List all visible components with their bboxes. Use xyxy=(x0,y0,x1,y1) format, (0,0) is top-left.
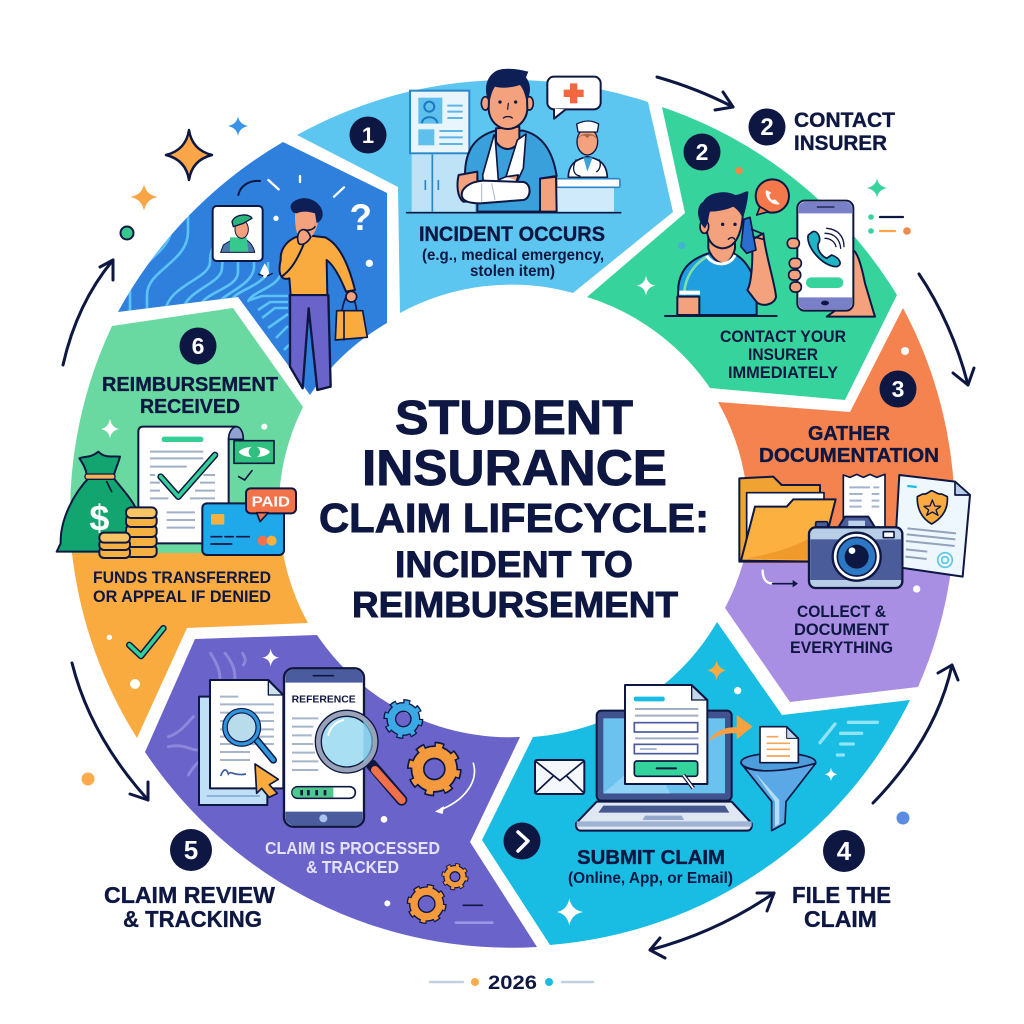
badge: number 6 xyxy=(180,328,216,364)
text: claim is processed and tracked: & TRACKED xyxy=(306,857,399,877)
panel: step 5 outside label: 5 xyxy=(184,835,198,865)
icon: coin stacks xyxy=(99,507,157,558)
panel: step 2 outside label: INSURER xyxy=(794,131,887,155)
icon: large orange gear xyxy=(412,746,457,792)
text: gather documentation: DOCUMENTATION xyxy=(759,445,939,467)
text: funds transferred or appeal if denied: OR APPEAL IF DENIED xyxy=(93,587,271,606)
text: funds transferred or appeal if denied xyxy=(93,568,271,606)
illustration: injured student and nurse xyxy=(407,69,621,213)
title xyxy=(319,392,709,625)
title: INCIDENT TO xyxy=(395,544,633,585)
text: incident occurs xyxy=(419,223,605,280)
text: contact your insurer immediately: IMMEDIATELY xyxy=(728,363,839,382)
title: INSURANCE xyxy=(362,440,667,496)
text: reimbursement received: RECEIVED xyxy=(140,396,240,418)
text: submit claim: SUBMIT CLAIM xyxy=(577,847,725,869)
panel: step 5 outside label xyxy=(104,829,276,932)
text: collect and document everything: COLLECT & xyxy=(797,602,886,621)
panel: step 2 outside label xyxy=(748,108,895,155)
text: submit claim: (Online, App, or Email) xyxy=(568,870,733,887)
text: reimbursement received xyxy=(102,374,278,418)
badge: number 3 xyxy=(880,370,916,408)
illustration: laptop form and funnel xyxy=(535,661,877,926)
text: contact your insurer immediately: INSURER xyxy=(748,345,818,364)
badge: number 1: 1 xyxy=(362,123,374,148)
arrow: step 5 to 6 xyxy=(72,663,148,800)
text: incident occurs: (e.g., medical emergency, xyxy=(422,247,604,264)
footer: year 2026 xyxy=(430,972,593,994)
illustration: documents, phone, magnifier and gears: REFERENCE xyxy=(292,694,356,705)
panel: step 4 outside label: FILE THE xyxy=(792,882,891,908)
badge: chevron xyxy=(504,822,540,860)
icon: medium orange gear xyxy=(410,887,443,921)
arrow: step 4 to 5 xyxy=(650,893,774,958)
text: gather documentation: GATHER xyxy=(808,423,891,445)
text: contact your insurer immediately xyxy=(720,327,846,382)
text: reimbursement received: REIMBURSEMENT xyxy=(102,374,278,396)
text: gather documentation xyxy=(759,423,939,467)
arrow: step 1 to 2 xyxy=(657,77,733,110)
illustration: folder, receipt, camera and report xyxy=(739,474,970,593)
text: claim is processed and tracked: CLAIM IS PROCESSED xyxy=(265,838,440,858)
badge: number 6: 6 xyxy=(192,333,204,359)
icon: sparkles and dots xyxy=(82,116,911,824)
text: claim is processed and tracked xyxy=(265,838,440,877)
panel: step 2 contact your insurer xyxy=(587,107,897,400)
panel: step 5 claim processed and tracked xyxy=(145,635,537,948)
text: contact your insurer immediately: CONTACT YOUR xyxy=(720,327,846,346)
illustration: thinking person with bag: ? xyxy=(349,197,372,238)
badge: number 3: 3 xyxy=(892,376,904,402)
badge: number 1 xyxy=(350,116,386,154)
panel: step 4 outside label: 4 xyxy=(837,836,852,866)
arrow: step 2 to 3 xyxy=(919,274,974,385)
text: incident occurs: stolen item) xyxy=(470,263,555,280)
title: STUDENT xyxy=(395,392,633,445)
illustration: money bag, coins, approved document and card: $ xyxy=(89,498,109,539)
panel: step 4 outside label xyxy=(792,830,891,932)
text: collect and document everything: EVERYTHING xyxy=(790,638,893,657)
footer: year 2026: 2026 xyxy=(488,972,537,994)
panel: step 2 outside label: CONTACT xyxy=(794,108,895,132)
panel: step 4 submit claim xyxy=(482,622,910,945)
text: submit claim xyxy=(568,847,733,887)
illustration: thinking person with bag xyxy=(213,176,373,390)
text: collect and document everything xyxy=(790,602,893,657)
panel: step 6 reimbursement received xyxy=(57,308,308,738)
text: collect and document everything: DOCUMENT xyxy=(794,620,890,639)
illustration: money bag, coins, approved document and card: PAID xyxy=(252,495,290,511)
title: REIMBURSEMENT xyxy=(352,584,678,625)
panel: concerned student in blue xyxy=(115,142,387,395)
arrow: step 3 to 4 xyxy=(873,665,958,803)
panel: step 5 outside label: & TRACKING xyxy=(123,906,262,932)
panel: step 3 gather documentation xyxy=(718,308,970,702)
panel: step 2 outside label: 2 xyxy=(760,114,774,141)
panel: step 4 outside label: CLAIM xyxy=(804,906,877,932)
illustration: documents, phone, magnifier and gears xyxy=(168,648,492,923)
illustration: money bag, coins, approved document and card xyxy=(57,418,296,689)
illustration: student calling on phone xyxy=(637,167,875,317)
text: incident occurs: INCIDENT OCCURS xyxy=(419,223,605,246)
icon: blue gear xyxy=(387,703,419,735)
title: CLAIM LIFECYCLE: xyxy=(319,495,709,541)
text: funds transferred or appeal if denied: FUNDS TRANSFERRED xyxy=(93,568,271,587)
pattern: circuit waves xyxy=(128,215,289,351)
icon: small orange gear xyxy=(444,866,466,888)
panel: step 1 incident occurs xyxy=(297,69,673,313)
badge: number 2: 2 xyxy=(696,139,708,165)
arrow: step 6 to 1 xyxy=(63,260,113,365)
badge: number 2 xyxy=(684,134,720,170)
panel: step 5 outside label: CLAIM REVIEW xyxy=(104,882,276,908)
